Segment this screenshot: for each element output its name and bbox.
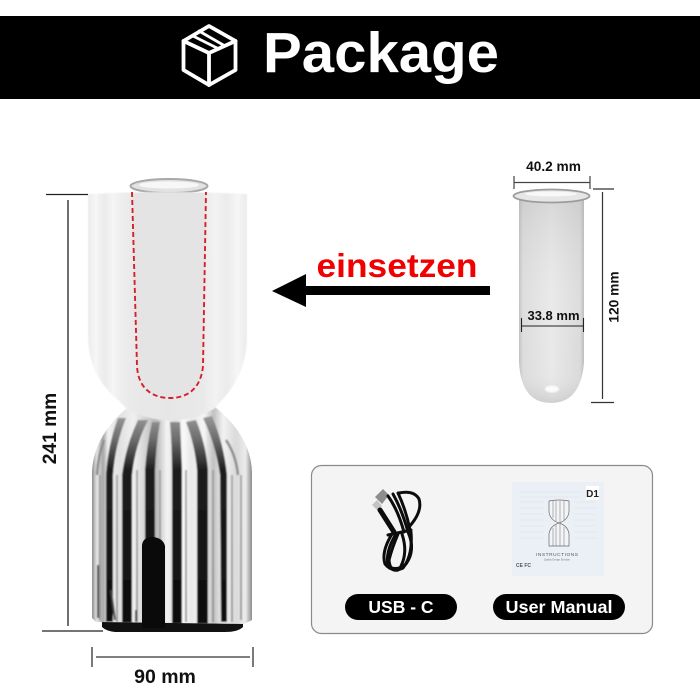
panel: accessories xyxy=(312,466,652,634)
touch switch xyxy=(142,537,165,628)
label: USB-C: USB - C xyxy=(368,597,434,617)
red dashed outline xyxy=(132,192,206,398)
label: User Manual: User Manual xyxy=(506,597,612,617)
dimension: tube height 120 mm xyxy=(591,189,622,402)
dimension: lamp width 90 mm xyxy=(92,647,253,688)
header banner xyxy=(0,16,700,99)
icon: instruction manual: Quality Design Emotion xyxy=(544,558,571,562)
dimension: tube top 40.2 mm xyxy=(514,159,590,189)
arrow: insert direction xyxy=(272,274,490,307)
dimension: tube top 40.2 mm: 40.2 mm xyxy=(526,159,581,174)
icon: instruction manual xyxy=(512,482,604,576)
label: User Manual xyxy=(493,594,625,620)
lamp xyxy=(88,179,258,632)
dimension: tube inner 33.8 mm xyxy=(522,308,584,332)
dimension: lamp width 90 mm: 90 mm xyxy=(134,666,196,688)
glass tube rim in lamp xyxy=(130,179,208,193)
lamp white shade xyxy=(88,192,247,420)
dimension: lamp height 241 mm xyxy=(40,194,103,631)
arrow label einsetzen: einsetzen xyxy=(316,247,478,284)
icon: instruction manual: CE FC xyxy=(516,563,531,569)
icon: instruction manual: INSTRUCTIONS xyxy=(536,552,578,558)
dimension: tube height 120 mm: 120 mm xyxy=(606,271,622,323)
lamp silver base xyxy=(88,400,258,632)
dimension: tube inner 33.8 mm: 33.8 mm xyxy=(527,308,580,323)
glass tube xyxy=(514,190,590,403)
label: USB-C xyxy=(345,594,457,620)
title: Package xyxy=(263,21,499,85)
icon: USB-C cable xyxy=(372,489,420,570)
icon: instruction manual: D1 xyxy=(586,489,599,500)
dimension: lamp height 241 mm: 241 mm xyxy=(40,393,61,464)
icon: package box xyxy=(184,26,236,85)
